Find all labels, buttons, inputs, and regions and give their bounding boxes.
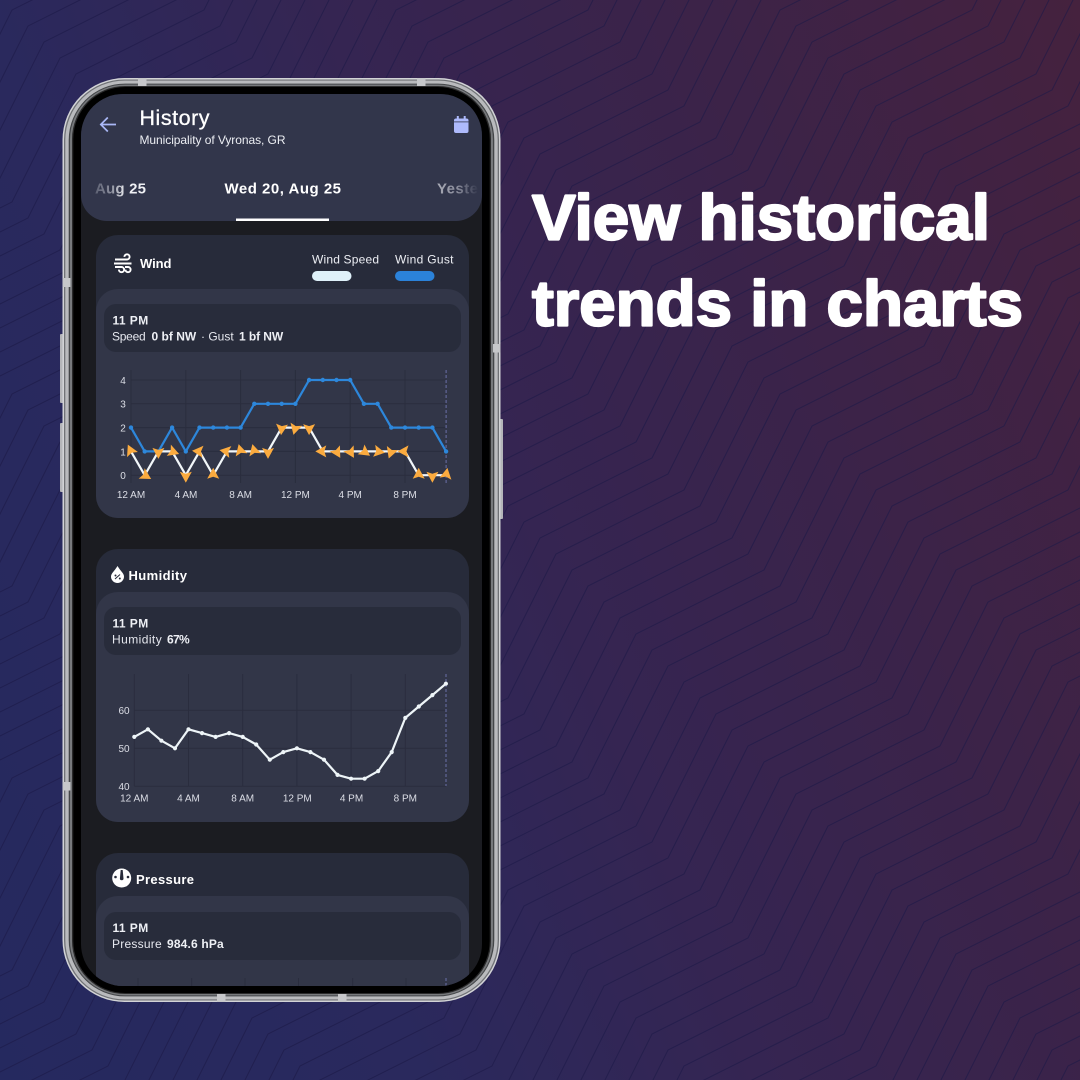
icon: calendar	[454, 116, 468, 133]
x axis labels	[120, 794, 416, 802]
heading: Wind: Wind	[140, 256, 172, 271]
series: wind gust	[131, 380, 446, 451]
tooltip: humidity	[104, 607, 461, 655]
tooltip: pressure: Pressure	[112, 937, 162, 951]
y axis labels: 2	[120, 424, 126, 434]
x axis labels: 12 AM	[120, 794, 148, 805]
x axis labels: 8 AM	[231, 794, 254, 805]
title	[532, 182, 1023, 340]
y axis labels: 1	[120, 448, 126, 458]
panel: humidity	[96, 549, 469, 822]
location: Municipality of Vyronas, GR	[140, 133, 286, 147]
y axis labels: 50	[118, 744, 130, 755]
tooltip: wind: 0 bf NW	[152, 330, 197, 344]
tab: selected day: Wed 20, Aug 25	[224, 180, 341, 197]
x axis labels: 8 PM	[393, 490, 417, 501]
phone	[60, 60, 503, 1013]
heading: Pressure: Pressure	[136, 872, 194, 887]
line chart: wind	[117, 370, 453, 501]
x axis labels: 12 PM	[281, 490, 310, 501]
line chart: humidity	[118, 674, 446, 805]
panel: pressure	[96, 853, 469, 986]
title: trends in charts	[532, 268, 1023, 340]
x axis labels	[118, 491, 416, 498]
series: humidity	[134, 684, 446, 779]
heading: History: History	[140, 106, 210, 130]
tooltip: wind: 11 PM	[112, 314, 148, 328]
icon: pressure gauge	[112, 868, 131, 888]
chart panel: wind	[96, 289, 469, 518]
x axis labels: 12 AM	[117, 490, 145, 501]
side buttons	[60, 334, 503, 519]
x axis labels: 8 PM	[394, 794, 417, 805]
tooltip: wind: Speed	[112, 330, 146, 344]
tooltip: humidity: Humidity	[112, 633, 162, 647]
y axis labels	[118, 706, 130, 793]
wind direction arrows	[122, 423, 453, 484]
tab: previous day: Aug 25	[95, 180, 146, 197]
title: View historical	[532, 182, 990, 254]
y axis labels: 40	[118, 782, 130, 793]
chart top: pressure	[138, 978, 446, 986]
tooltip: humidity: 67%	[167, 633, 190, 647]
icon: back arrow	[101, 118, 116, 132]
tooltip: wind: 1 bf NW	[239, 330, 284, 344]
tab: next day: Yeste	[437, 180, 478, 197]
chart panel: humidity	[96, 592, 469, 822]
y axis labels: 4	[120, 376, 126, 387]
tooltip: pressure	[104, 912, 461, 960]
x axis labels: 4 PM	[340, 794, 363, 805]
series: wind speed	[131, 428, 446, 475]
x axis labels: 4 AM	[175, 490, 197, 501]
tooltip: humidity: 11 PM	[112, 617, 148, 631]
heading: Humidity: Humidity	[128, 568, 188, 583]
legend: wind gust	[395, 252, 454, 281]
panel: wind	[96, 235, 469, 518]
x axis labels: 8 AM	[229, 490, 252, 501]
legend: wind speed	[312, 252, 379, 281]
tooltip: wind	[104, 304, 461, 352]
x axis labels: 4 AM	[177, 794, 200, 805]
tooltip: pressure: 11 PM	[112, 921, 148, 935]
icon: wind	[114, 254, 132, 272]
screen	[81, 60, 482, 1013]
x axis labels: 12 PM	[283, 794, 312, 805]
tooltip: pressure: 984.6 hPa	[167, 937, 224, 951]
y axis labels: 60	[118, 706, 130, 717]
tooltip: wind: · Gust	[201, 330, 234, 344]
x axis labels: 4 PM	[339, 490, 362, 501]
header panel	[81, 94, 482, 221]
y axis labels: 0	[120, 471, 126, 482]
y axis labels: 3	[120, 400, 126, 410]
chart panel: pressure	[96, 896, 469, 986]
icon: humidity drop	[111, 566, 124, 583]
antenna bands	[63, 78, 500, 1002]
y axis labels	[120, 377, 126, 479]
phone frame	[62, 78, 500, 1002]
legend: wind gust: Wind Gust	[395, 252, 454, 266]
tab indicator	[236, 218, 329, 221]
legend: wind speed: Wind Speed	[312, 252, 379, 266]
